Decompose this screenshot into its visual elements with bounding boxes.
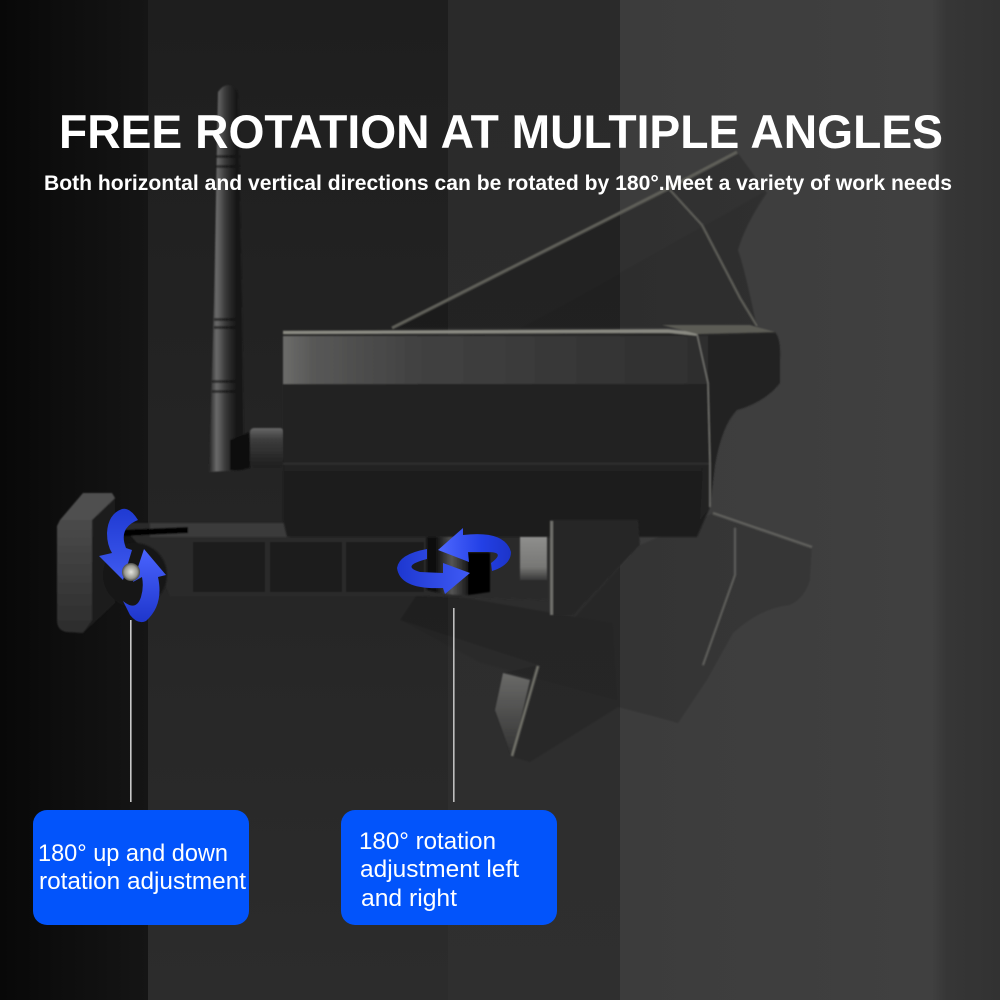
callout: left and right: adjustment left	[360, 856, 519, 883]
mounting arm	[118, 523, 548, 600]
callout: left and right: 180° rotation	[359, 828, 496, 855]
callout: up and down	[33, 810, 249, 925]
camera housing	[283, 325, 780, 537]
wall plate	[57, 493, 167, 633]
leader line: left	[130, 620, 132, 802]
bracket	[520, 520, 640, 615]
antenna	[209, 85, 284, 472]
callout: left and right: and right	[361, 885, 457, 912]
callout: up and down: rotation adjustment	[39, 868, 246, 895]
swivel joint	[426, 537, 490, 595]
ghost camera: rotated down	[400, 513, 812, 762]
title: FREE ROTATION AT MULTIPLE ANGLES	[59, 105, 943, 158]
ghost camera: rotated up	[392, 152, 767, 328]
callout: left and right	[341, 810, 557, 925]
icon: blue horizontal rotation arrows	[397, 528, 511, 594]
leader line: right	[453, 608, 455, 802]
icon: blue vertical rotation arrows	[99, 509, 166, 622]
callout: up and down: 180° up and down	[38, 840, 228, 867]
subtitle: Both horizontal and vertical directions can be rotated by 180°.Meet a variety of work needs	[44, 172, 952, 195]
